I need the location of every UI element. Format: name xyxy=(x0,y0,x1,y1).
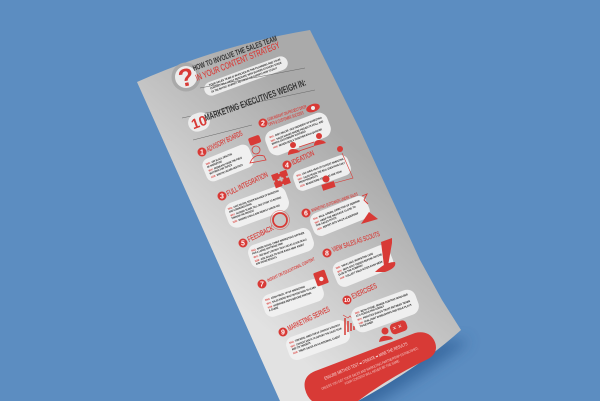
panel 8: view sales as scouts xyxy=(322,231,396,289)
text card: WHY: xyxy=(314,219,320,225)
panel 6: marketing outstanding sales xyxy=(302,191,378,238)
text card: HOW: xyxy=(300,183,306,188)
icon: puzzle xyxy=(271,170,291,188)
heading: EXERCISES xyxy=(350,281,378,301)
icon: feedback loop xyxy=(270,210,290,230)
number 7: 7 xyxy=(260,282,264,288)
heading: VIEW SALES AS SCOUTS xyxy=(331,231,381,254)
text card: WHY: xyxy=(230,212,236,218)
panel 3: full integration xyxy=(218,170,292,230)
text card: BRAINSTORM TOPICS AS ONE TEAM xyxy=(305,169,343,186)
text card: WHY: xyxy=(208,167,214,173)
text card: WHO: xyxy=(296,172,302,178)
text card xyxy=(291,153,353,193)
number 5: 5 xyxy=(241,240,245,248)
intro text pill: YOUR SALES TEAM IS INVOLVED IN THE PLANNING AND YOUR xyxy=(208,57,281,87)
text card: WHO: xyxy=(313,215,319,221)
text card: CONTENT EXISTS TO SUPPORT THE SALES TEAM xyxy=(296,326,343,347)
heading: FULL INTEGRATION xyxy=(225,170,269,198)
text card: WHO: xyxy=(289,339,295,345)
text card: WHO: xyxy=(227,205,233,211)
panel 1: advisory boards xyxy=(198,129,266,183)
text card: SALES HEARS THE REAL QUESTIONS DAILY xyxy=(303,161,346,179)
text card: HOW: xyxy=(210,174,217,179)
heading line 1: HOW TO INVOLVE THE SALES TEAM xyxy=(192,34,279,73)
text card: WHY: xyxy=(266,300,272,306)
number 2: 2 xyxy=(261,120,265,128)
intro text pill xyxy=(202,54,290,98)
number 4: 4 xyxy=(285,162,289,170)
icon: eye xyxy=(305,102,321,114)
number 10: 10 xyxy=(344,298,350,304)
text card xyxy=(263,110,333,158)
text card: THROUGH THE PROCESS xyxy=(231,208,255,220)
footer line 3: YOUR CONTENT WILL NEVER BE THE SAME. xyxy=(344,359,401,386)
text card: FOR A LARGE SOFTWARE FIRM xyxy=(252,241,284,256)
text card: KATE WILSON, SENIOR MANAGER OF MARKETING xyxy=(233,189,279,209)
text card: FEEDBACK FROM THE FIELD xyxy=(213,156,243,170)
text card: INTERVIEW REPS BEFORE WRITING xyxy=(273,291,312,308)
text card: SARA LONG, MARKETING LEAD xyxy=(341,251,374,268)
text card: REPS SPOT TRENDS BEFORE ANYONE xyxy=(342,252,383,272)
text card: WHO: xyxy=(251,247,257,253)
panel 5: feedback xyxy=(238,210,316,270)
divider xyxy=(182,90,315,118)
text card xyxy=(246,226,316,270)
text card: ANDY MILLER, VICE PRESIDENT OF MARKETING xyxy=(274,116,322,137)
text card: MONTHLY BOARD MEETINGS xyxy=(216,163,244,177)
paper page xyxy=(137,30,461,401)
text card: THE SALES PITCH xyxy=(315,216,337,228)
page shadow xyxy=(300,340,470,401)
text card xyxy=(349,287,421,335)
footer line 1: ENSURE METHOD TEST ➡ ITERATE ➡ MINE THE RESULTS xyxy=(323,341,408,381)
text card: HOW: xyxy=(254,258,260,263)
panel 2: insight on drop offs xyxy=(258,102,333,158)
text card: WHY: xyxy=(297,176,303,182)
heading: MARKETING SERVES xyxy=(286,305,331,333)
text card: HOW: xyxy=(339,275,345,280)
text card: AT A CONSULTING AGENCY xyxy=(355,304,385,318)
title block xyxy=(172,34,290,98)
number 6: 6 xyxy=(304,210,308,218)
text card xyxy=(330,243,396,289)
text card: BETH STONE, SENIOR CONTENT MANAGER xyxy=(360,292,408,313)
text card: FROM PROSPECTS xyxy=(298,174,318,184)
panel 4: ideation xyxy=(282,146,353,193)
text card: WHO: xyxy=(265,297,271,302)
text card: AND COMMUNICATIONS xyxy=(228,202,252,214)
text card: RUN JOINT WORKSHOPS AND ROLE PLAYS xyxy=(364,303,412,324)
text card: HOW: xyxy=(292,350,299,355)
text card xyxy=(284,318,352,362)
text card: A GUIDE xyxy=(268,305,279,312)
icon: person with speech bubble: ✕ ✕ xyxy=(392,323,403,332)
number 3: 3 xyxy=(220,194,224,200)
text card: HOW: xyxy=(267,304,273,310)
text card: OF MARKETING xyxy=(206,159,223,169)
text card: HOW: xyxy=(232,219,238,224)
heading: ADVISORY BOARDS xyxy=(205,129,244,154)
text card: WHO: xyxy=(269,134,275,139)
text card: WHY: xyxy=(253,254,259,259)
divider xyxy=(200,68,305,88)
text card: WHO: xyxy=(354,310,360,315)
text card: COLLECT FIELD NOTES EACH WEEK xyxy=(345,259,383,278)
text card: PAUL GREEN, DIRECTOR OF DEMAND xyxy=(318,199,360,219)
text card: JOHN PRICE, VP OF MARKETING xyxy=(270,285,306,300)
text card xyxy=(260,277,326,319)
heading: INSIGHT ON EDUCATIONAL CONTENT xyxy=(266,256,316,283)
text card: WHICH CUSTOMERS SUCCEED xyxy=(271,129,306,146)
text card: PRACTICE BUILDS TRUST BETWEEN TEAMS xyxy=(362,299,411,320)
heading xyxy=(267,104,307,127)
panel 9: marketing serves xyxy=(278,305,354,362)
icon: bar chart xyxy=(343,315,354,335)
subtitle xyxy=(186,78,308,134)
panel 7: educational content xyxy=(258,256,329,319)
text card: ASK SALES TO RATE EACH NEW ASSET xyxy=(260,242,305,261)
text card: ALIGNED TEAMS TELL ONE STORY TO BUYERS xyxy=(235,195,282,215)
text card: HOW: xyxy=(358,320,364,326)
text card: SEE WHAT CONTENT TRULY HELPS CLOSE DEALS xyxy=(259,237,307,257)
heading: IDEATION xyxy=(290,149,316,167)
number 1: 1 xyxy=(200,150,204,156)
subtitle text: MARKETING EXECUTIVES WEIGH IN: xyxy=(203,78,308,124)
text card: WHY: xyxy=(290,343,296,349)
icon: people and speech xyxy=(248,135,266,163)
text card: AMY BLACK, DIRECTOR xyxy=(211,152,233,164)
icon: lightbulb and desk with connector xyxy=(321,146,353,191)
text card: WHY: xyxy=(337,268,343,274)
question mark icon: ? xyxy=(176,63,197,93)
text card: HOW: xyxy=(273,144,279,150)
icon: lighthouse xyxy=(375,238,395,272)
number 8: 8 xyxy=(325,250,329,258)
footer line 2: UNLESS YOU GET YOUR SALES AND MARKETING PARTNERSHIP ESTABLISHED, xyxy=(321,346,419,391)
divider xyxy=(193,125,252,140)
heading: FEEDBACK xyxy=(246,223,275,244)
text card: SHARED GOALS AND WEEKLY CHECK-INS xyxy=(238,203,281,222)
text card: REPORT INTO SALES LEADERSHIP xyxy=(322,211,359,229)
text card: HOW: xyxy=(317,226,323,231)
text card: LISA CHEN, HEAD OF CONTENT MARKETING xyxy=(301,157,344,176)
heading: GAIN INSIGHT ON PROJECT DROP xyxy=(267,104,307,122)
text card xyxy=(308,194,372,238)
icon: two people exchanging xyxy=(288,133,326,155)
icon: document xyxy=(313,269,329,287)
intro text pill: CONTENT WILL LIKELY RESONATE WITH BUYERS AT EVERY STAGE xyxy=(209,61,282,90)
text card: AND ITS TARGETS xyxy=(291,341,311,351)
panel 10: exercises xyxy=(342,281,421,342)
text card: WHO: xyxy=(205,161,211,166)
text card: REVIEW DEALS TOGETHER EACH QUARTER xyxy=(278,127,323,147)
text card xyxy=(200,143,256,183)
heading line 2: IN YOUR CONTENT STRATEGY xyxy=(194,40,281,83)
text card xyxy=(222,184,292,230)
text card: ELSE IN THE COMPANY xyxy=(338,263,364,277)
text card: TREAT SALES AS AN INTERNAL CLIENT xyxy=(298,334,341,353)
icon: pyramid xyxy=(361,194,378,224)
text card: KEEP THE MESSAGE CLOSE TO xyxy=(320,205,356,223)
intro text pill: OF THE BUYING JOURNEY. WE ASKED THE EXPERTS HOW TO DO IT xyxy=(211,66,278,94)
text card: SALES KNOWS WHERE PROJECTS STALL AND xyxy=(276,119,324,141)
text card: MARK DAVIS, CHIEF MARKETING OFFICER xyxy=(256,231,305,251)
text card: TOM REED, DIRECTOR OF CONTENT STRATEGY xyxy=(294,323,341,343)
text card: AND SHARE RESULTS xyxy=(255,255,277,266)
red footer callout xyxy=(305,332,436,401)
text card: SALES KNOWS WHAT BUYERS NEED TO LEARN xyxy=(272,285,316,304)
text card: MATTERS FOR TOPICS xyxy=(209,163,233,176)
text card: WHY: xyxy=(270,138,276,143)
text card: WHO: xyxy=(335,265,341,270)
text card: TOGETHER xyxy=(359,320,374,328)
text card: WHY: xyxy=(357,316,363,322)
10 badge: 10 xyxy=(189,112,209,132)
heading: OFFS & CUSTOMER SUCCESS xyxy=(268,110,304,127)
number 9: 9 xyxy=(281,330,285,336)
heading: MARKETING OUTSTANDS UNDER SALES xyxy=(311,191,358,213)
